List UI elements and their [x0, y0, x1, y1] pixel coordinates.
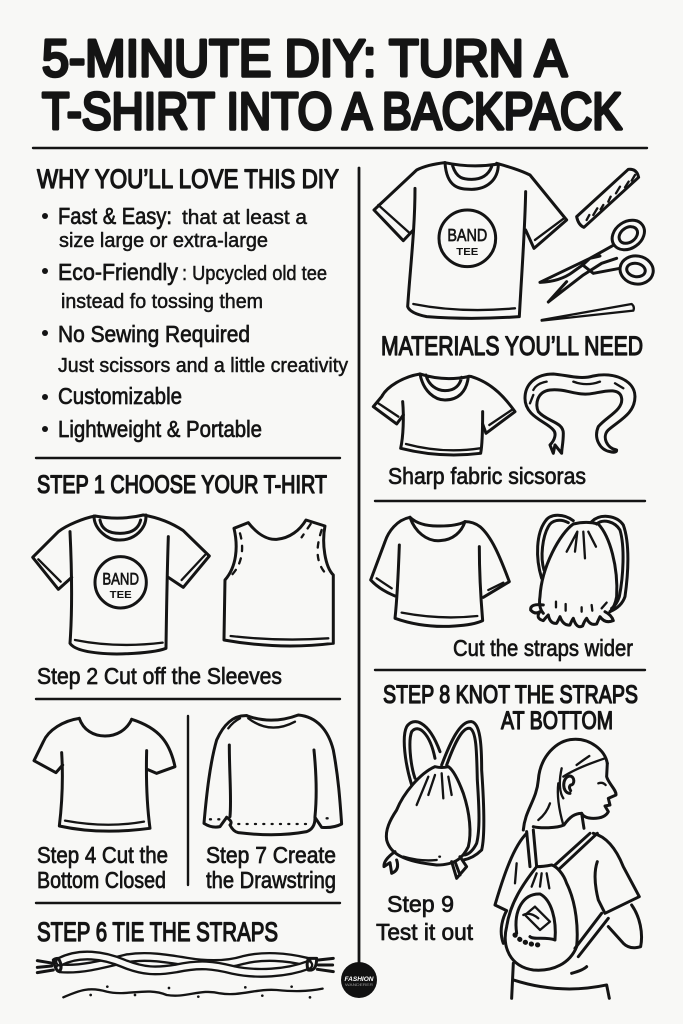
title: 5-MINUTE DIY: TURN A [42, 30, 567, 88]
icon: sweatshirt [204, 715, 342, 835]
icon: cut tee [371, 517, 509, 626]
straps and bag [505, 830, 608, 970]
text: step 4: Bottom Closed [37, 867, 166, 893]
bullet list: Lightweight & Portable [58, 416, 262, 442]
head and hair [523, 739, 616, 830]
logo badge: WANDERER [345, 982, 373, 987]
icon: strap [525, 374, 635, 453]
text: step 7: Step 7 Create [206, 842, 336, 868]
heading: why you'll love this diy: WHY YOU’LL LOVE THIS DIY [37, 164, 339, 194]
shirt [495, 833, 642, 998]
icon: finished backpack [384, 722, 484, 878]
title [42, 30, 622, 141]
icon: band tee step 1: TEE [110, 590, 132, 601]
bullet list: Eco-Friendly [58, 259, 178, 285]
icon: sleeveless shirt [224, 520, 333, 646]
icon: band tee step 1: BAND [102, 569, 139, 588]
bullet list [42, 203, 348, 442]
icon: thin needle [542, 304, 634, 321]
icon: scissors [540, 214, 655, 302]
text: step 4: Step 4 Cut the [37, 842, 168, 868]
text: step 2: Step 2 Cut off the Sleeves [37, 663, 282, 689]
text: cut the straps wider: Cut the straps wider [453, 635, 633, 661]
panel: why you'll love this diy [37, 164, 348, 442]
bullet list: Fast & Easy: [58, 203, 172, 229]
illustration: person wearing backpack [495, 739, 642, 998]
heading: step 6: STEP 6 TIE THE STRAPS [37, 917, 278, 947]
bullet list: instead fo tossing them [61, 291, 263, 313]
text: step 9: Test it out [376, 919, 474, 945]
text: step 9 [376, 891, 474, 945]
text: step 9: Step 9 [387, 891, 454, 917]
icon: twisted straps [37, 955, 333, 999]
text: step 7: the Drawstring [206, 867, 336, 893]
icon: band tee step 1 [33, 515, 209, 654]
icon: ruler [577, 169, 639, 227]
icon: band tee materials [374, 163, 567, 318]
icon: tee step 4 [34, 718, 175, 831]
bullet list: Just scissors and a little creativity [58, 355, 348, 377]
logo badge: FASHION [344, 976, 374, 983]
icon: drawstring bag [531, 515, 628, 627]
bullet list: : Upcycled old tee [182, 263, 327, 285]
heading: step 1: STEP 1 CHOOSE YOUR T-HIRT [37, 471, 327, 499]
heading: step 8 [383, 681, 638, 735]
bullet list: size large or extra-large [59, 230, 268, 252]
icon: band tee materials: BAND [447, 225, 487, 245]
text: sharp fabric scissors: Sharp fabric sicsoras [388, 463, 586, 489]
heading: step 8: AT BOTTOM [501, 707, 613, 735]
icon: cropped tee [373, 374, 515, 455]
text: step 4 [37, 842, 168, 893]
bullet list: that at least a [182, 207, 308, 229]
icon: band tee materials: TEE [456, 247, 479, 258]
bullet list: Customizable [58, 383, 182, 409]
text: step 7 [206, 842, 336, 893]
logo badge [341, 962, 377, 998]
bullet list: No Sewing Required [58, 321, 250, 347]
